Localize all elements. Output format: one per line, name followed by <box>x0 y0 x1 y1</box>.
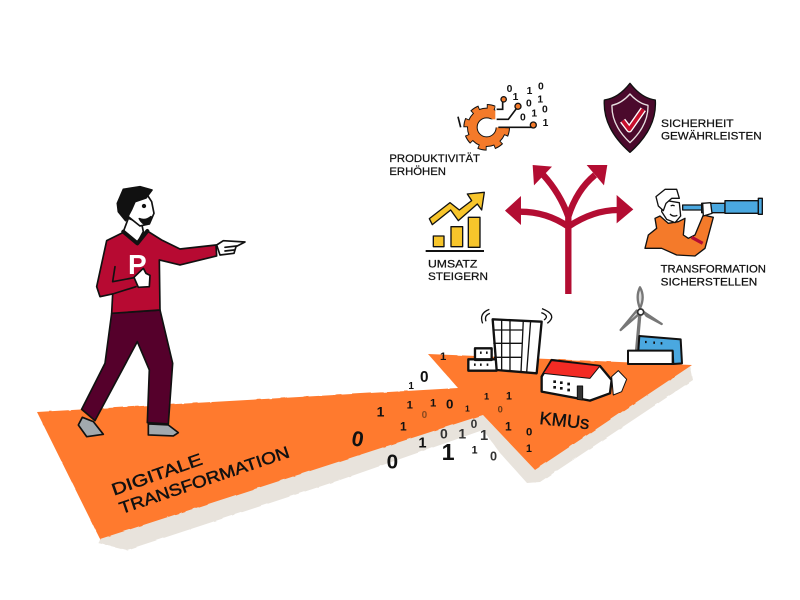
binary digit stream: 1 <box>506 390 512 402</box>
binary digit stream: 1 <box>505 420 512 434</box>
binary digit stream: 1 <box>418 435 426 451</box>
eye <box>671 203 675 208</box>
label: umsatz <box>428 258 488 283</box>
binary digit stream: 0 <box>490 450 497 464</box>
coat band <box>692 237 703 243</box>
door <box>577 386 583 400</box>
binary digit stream: 1 <box>430 398 436 410</box>
binary digit stream: 0 <box>440 425 448 441</box>
wifi right <box>541 309 552 323</box>
hair <box>656 189 679 211</box>
thumb-up hand <box>134 268 150 287</box>
binary digits: 0 <box>526 99 532 110</box>
label: produktivitaet <box>389 153 480 178</box>
binary digit stream <box>350 351 532 473</box>
binary digit stream: 0 <box>420 369 429 386</box>
binary digits: 0 <box>520 112 526 123</box>
binary digits: 1 <box>527 86 533 97</box>
binary digits: 1 <box>531 109 537 120</box>
sweater <box>97 231 217 313</box>
binary digit stream: 1 <box>526 443 532 455</box>
circuit nodes <box>501 97 536 128</box>
low building windows <box>474 353 488 365</box>
binary digit stream: 1 <box>400 420 407 434</box>
label: produktivitaet: PRODUKTIVITÄT <box>389 153 480 165</box>
roof <box>543 361 600 378</box>
binary digit stream: 1 <box>480 428 488 444</box>
label: transformation sicherstellen: SICHERSTELLEN <box>661 276 757 288</box>
wind turbine <box>621 287 662 350</box>
bars <box>433 217 480 247</box>
binary digit stream: 0 <box>446 396 453 411</box>
trend arrow <box>429 192 484 225</box>
binary digit stream: 1 <box>408 381 414 392</box>
icon: shield <box>604 83 655 152</box>
binary digit stream: 1 <box>472 444 478 456</box>
label: sicherheit: SICHERHEIT <box>661 118 734 130</box>
house <box>542 360 612 401</box>
icon: revenue chart <box>426 192 484 251</box>
tower grid <box>493 319 531 373</box>
trousers <box>82 310 173 424</box>
binary digits: 1 <box>537 95 543 106</box>
binary digit stream: 1 <box>440 351 446 363</box>
binary digits: 0 <box>507 84 513 95</box>
binary digit stream: 0 <box>422 410 428 421</box>
binary digit stream: 1 <box>458 425 466 441</box>
baseline <box>426 248 484 254</box>
smile <box>670 214 677 216</box>
face <box>128 195 154 226</box>
face <box>662 200 681 223</box>
sweater letter: P <box>128 249 147 280</box>
binary digit stream: 0 <box>526 426 532 438</box>
pointing fingers <box>225 246 237 251</box>
binary digit stream: 1 <box>484 391 489 401</box>
label: umsatz: UMSATZ <box>428 258 478 270</box>
orange arrow <box>37 354 692 539</box>
hand <box>703 203 712 216</box>
person pointing <box>78 187 245 437</box>
KMUs label: KMUs <box>539 408 590 433</box>
bush <box>612 371 627 395</box>
binary digit stream: 1 <box>442 439 455 465</box>
binary digit stream: 1 <box>407 399 413 411</box>
KMU scene <box>468 309 627 401</box>
binary digits <box>507 81 549 129</box>
binary digits: 0 <box>538 81 544 92</box>
factory <box>628 336 682 364</box>
pointing hand <box>217 241 245 255</box>
hair <box>117 187 152 221</box>
binary digits: 1 <box>543 118 549 129</box>
left shoe <box>78 417 103 437</box>
telescope <box>683 198 762 214</box>
label: sicherheit <box>661 118 762 143</box>
wifi left <box>482 309 490 323</box>
label: transformation sicherstellen: TRANSFORMATION <box>661 264 766 276</box>
label: umsatz: STEIGERN <box>428 271 488 283</box>
binary digit stream: 0 <box>498 405 503 415</box>
label: produktivitaet: ERHÖHEN <box>389 166 446 178</box>
label: sicherheit: GEWÄHRLEISTEN <box>661 131 762 143</box>
binary digit stream: 0 <box>350 426 366 452</box>
icon group: productivity gear <box>458 81 549 147</box>
check mark <box>623 109 643 129</box>
eye <box>143 205 145 207</box>
binary digits: 0 <box>542 104 548 115</box>
low building <box>468 348 497 371</box>
collar <box>123 231 147 243</box>
red forked arrows <box>505 165 633 294</box>
binary digit stream: 0 <box>471 417 478 431</box>
windows <box>553 382 570 390</box>
smile <box>139 217 151 224</box>
right shoe <box>148 424 178 436</box>
office tower <box>493 319 542 373</box>
arrow shadow <box>98 365 693 550</box>
neck <box>123 218 143 244</box>
arrow label: digitale transformation: DIGITALE <box>109 450 205 499</box>
binary digit stream: 0 <box>387 450 398 473</box>
gear <box>467 103 515 147</box>
binary digit stream: 1 <box>465 403 470 413</box>
binary digits: 1 <box>513 92 519 103</box>
binary digit stream: 1 <box>377 404 385 420</box>
circuit lines <box>458 100 533 127</box>
label: transformation sicherstellen <box>661 264 766 288</box>
sleeve fold <box>113 267 136 294</box>
telescope figure <box>645 189 762 256</box>
coat <box>645 215 713 256</box>
arrow label: digitale transformation: TRANSFORMATION <box>117 443 292 518</box>
